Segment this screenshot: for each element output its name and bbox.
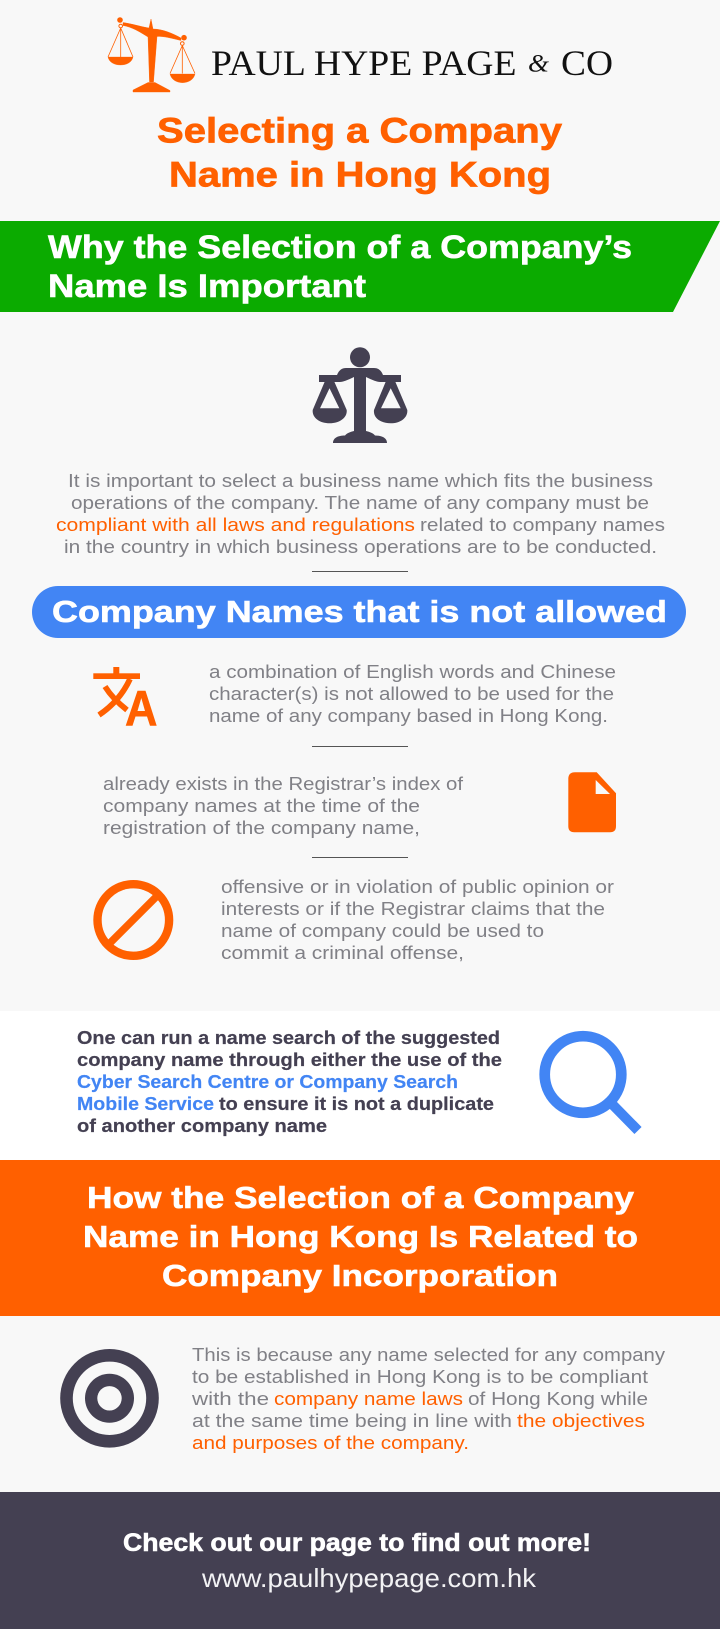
text block: offensive names: interests or if the Registrar claims that the xyxy=(221,898,605,919)
heading: relation to incorporation: How the Selection of a Company xyxy=(87,1180,635,1215)
text block: english and chinese combination: name of any company based in Hong Kong. xyxy=(209,705,608,726)
text block: compliance with name laws: of Hong Kong while xyxy=(468,1388,648,1409)
text block: name search instructions: Cyber Search Centre or Company Search xyxy=(77,1071,458,1092)
heading: relation to incorporation xyxy=(83,1180,638,1293)
text block: offensive names: name of company could be used to xyxy=(221,920,544,941)
text block: already exists in index: company names at the time of the xyxy=(103,795,420,816)
text block: english and chinese combination: a combination of English words and Chinese xyxy=(209,661,616,682)
title xyxy=(157,112,563,194)
text block: name search instructions: of another company name xyxy=(77,1115,327,1136)
panel: orange heading xyxy=(0,1160,720,1316)
text block: english and chinese combination xyxy=(209,661,616,726)
text block: compliance with name laws: at the same time being in line with xyxy=(192,1410,512,1431)
text block: compliance with name laws: company name laws xyxy=(274,1388,463,1409)
text block: why the name matters: compliant with all laws and regulations xyxy=(56,514,415,535)
panel: green heading banner xyxy=(0,221,720,312)
text block: compliance with name laws: and purposes of the company. xyxy=(192,1432,469,1453)
company name: & xyxy=(528,50,550,78)
text block: offensive names: offensive or in violation of public opinion or xyxy=(221,876,614,897)
panel: name search xyxy=(0,1011,720,1160)
text block: why the name matters: in the country in which business operations are to be conducted. xyxy=(64,536,657,557)
call to action: Check out our page to find out more! xyxy=(123,1529,591,1557)
text block: why the name matters: It is important to select a business name which fits the business xyxy=(68,470,653,491)
text block: compliance with name laws: the objectives xyxy=(517,1410,645,1431)
text block: compliance with name laws xyxy=(191,1344,666,1453)
text block: compliance with name laws: This is because any name selected for any company xyxy=(192,1344,666,1365)
company name: PAUL HYPE PAGE xyxy=(211,43,516,83)
title: Name in Hong Kong xyxy=(169,156,551,194)
heading: relation to incorporation: Name in Hong Kong Is Related to xyxy=(83,1219,638,1254)
heading: why the selection is important: Name Is Important xyxy=(48,268,366,304)
icon: target xyxy=(60,1349,159,1448)
panel: footer xyxy=(0,1492,720,1629)
icon: dark balance scale xyxy=(313,347,407,443)
text block: name search instructions: One can run a name search of the suggested xyxy=(77,1027,500,1048)
icon: translate xyxy=(93,667,157,726)
company name: CO xyxy=(561,43,613,83)
website address: www.paulhypepage.com.hk xyxy=(201,1563,537,1593)
heading: names not allowed: Company Names that is not allowed xyxy=(52,594,667,629)
text block: name search instructions: company name through either the use of the xyxy=(77,1049,502,1070)
icon: prohibited sign xyxy=(98,884,169,956)
text block: already exists in index: already exists in the Registrar’s index of xyxy=(103,773,464,794)
title: Selecting a Company xyxy=(157,112,563,150)
text block: already exists in index: registration of the company name, xyxy=(103,817,420,838)
icon: document xyxy=(568,772,616,832)
text block: english and chinese combination: character(s) is not allowed to be used for the xyxy=(209,683,614,704)
text block: name search instructions: Mobile Service xyxy=(77,1093,214,1114)
text block: compliance with name laws: to be established in Hong Kong is to be compliant xyxy=(192,1366,648,1387)
panel: blue pill heading xyxy=(32,586,686,638)
text block: compliance with name laws: with the xyxy=(191,1388,269,1409)
text block: offensive names xyxy=(221,876,614,963)
heading: why the selection is important: Why the Selection of a Company’s xyxy=(48,229,632,265)
heading: why the selection is important xyxy=(48,229,632,304)
heading: relation to incorporation: Company Incorporation xyxy=(162,1258,558,1293)
text block: why the name matters xyxy=(56,470,665,557)
text block: name search instructions xyxy=(77,1027,502,1136)
text block: why the name matters: related to company names xyxy=(420,514,665,535)
text block: name search instructions: to ensure it is not a duplicate xyxy=(219,1093,494,1114)
text block: why the name matters: operations of the company. The name of any company must be xyxy=(71,492,649,513)
logo xyxy=(108,17,613,92)
text block: offensive names: commit a criminal offense, xyxy=(221,942,464,963)
icon: magnifying glass xyxy=(545,1036,638,1130)
icon: orange balance scale xyxy=(108,17,195,92)
text block: already exists in index xyxy=(103,773,464,838)
